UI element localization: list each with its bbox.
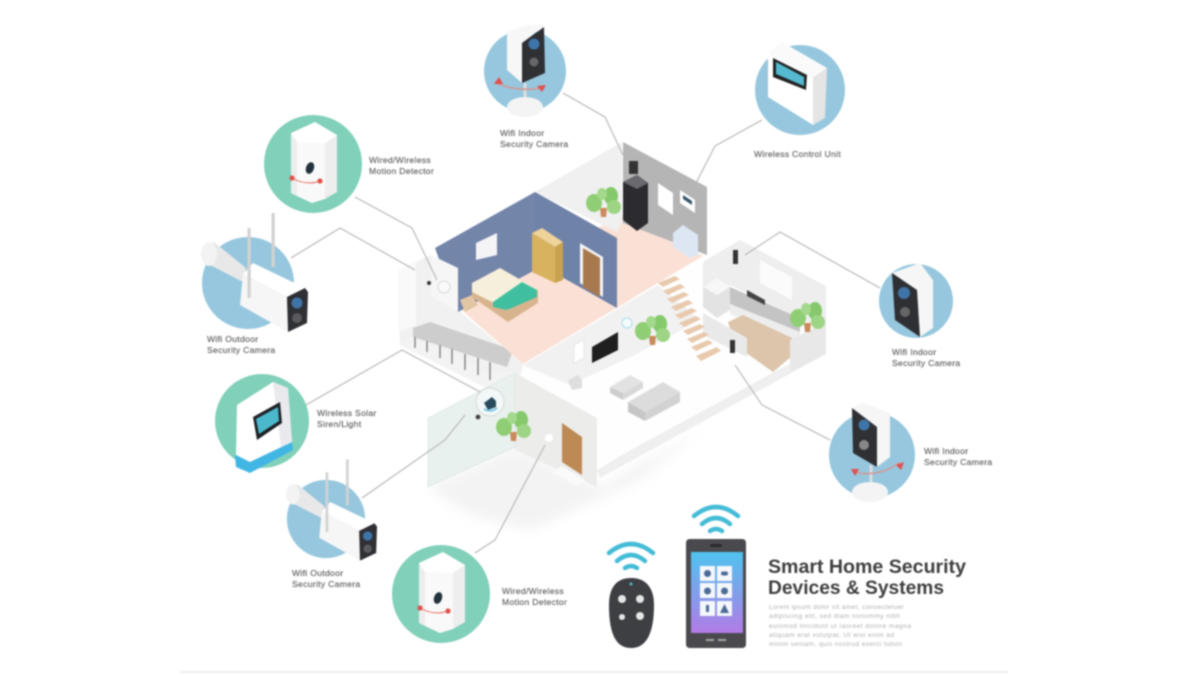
bedroom wall end: [427, 255, 458, 312]
living room back wall: [523, 285, 700, 385]
description text: euismod tincidunt ut laoreet dolore magna: [769, 623, 911, 630]
device: motion detector lower: [392, 545, 490, 643]
label: motion detector lower: Motion Detector: [502, 597, 567, 607]
device: indoor camera lower right: [829, 403, 915, 502]
label: motion detector lower: Wired/Wireless: [502, 586, 564, 596]
device: wireless solar siren: [215, 374, 309, 473]
upper floor: [458, 215, 703, 364]
living room furniture: [568, 315, 680, 421]
description text: adipiscing elit, sed diam nonummy nibh: [769, 613, 900, 620]
stair half wall: [703, 313, 747, 357]
icon: phone wifi signal: [694, 507, 738, 531]
icon: remote wifi signal: [609, 544, 653, 568]
house illustration: [398, 142, 826, 487]
label: top camera: Wifi Indoor: [500, 128, 544, 138]
slab front edge: [597, 344, 826, 478]
back room white wall: [535, 142, 622, 232]
device: outdoor camera lower: [286, 460, 377, 561]
label: outdoor camera upper: Security Camera: [207, 345, 276, 355]
entry plant: [496, 411, 531, 441]
label: motion detector upper: Wired/Wireless: [369, 155, 431, 165]
device: motion detector upper: [264, 115, 362, 213]
label: outdoor camera upper: Wifi Outdoor: [207, 334, 258, 344]
back room items: [586, 161, 698, 258]
label: siren: Wireless Solar: [317, 408, 377, 418]
kitchen walls: [703, 240, 826, 372]
label: outdoor camera lower: Wifi Outdoor: [292, 568, 343, 578]
connector lines: [291, 93, 880, 553]
upper left block and balcony: [398, 255, 523, 402]
title: Devices & Systems: [768, 577, 944, 599]
wall sensors: [476, 250, 738, 419]
back room grey wall: [623, 142, 707, 255]
front wall with door: [515, 373, 597, 487]
glass wall: [428, 373, 515, 487]
key fob remote: [609, 578, 654, 648]
floor shadow: [428, 430, 700, 530]
label: control unit: Wireless Control Unit: [754, 149, 841, 159]
bedroom blue walls: [435, 192, 535, 312]
label: indoor camera right: Wifi Indoor: [892, 347, 936, 357]
description text: Lorem ipsum dolor sit amet, consectetuer: [769, 604, 905, 611]
label: outdoor camera lower: Security Camera: [292, 579, 360, 589]
description text: aliquam erat volutpat. Ut wisi enim ad: [769, 632, 894, 639]
description text: minim veniam, quis nostrud exerci tution: [769, 641, 902, 648]
smartphone: [686, 539, 746, 648]
label: top camera: Security Camera: [500, 139, 568, 149]
app tiles: [700, 566, 732, 616]
device: wireless control unit: [755, 42, 845, 135]
stairs: [658, 276, 721, 361]
label: indoor camera right: Security Camera: [892, 358, 960, 368]
title: Smart Home Security: [768, 556, 966, 578]
bedroom furniture: [460, 228, 603, 322]
device: indoor camera right: [879, 263, 953, 338]
lower floor slab: [515, 240, 826, 478]
label: siren: Siren/Light: [317, 419, 362, 429]
label: motion detector upper: Motion Detector: [369, 166, 434, 176]
device: outdoor camera upper: [201, 213, 308, 332]
label: indoor camera lower right: Wifi Indoor: [924, 446, 968, 456]
device: wifi indoor camera top: [484, 25, 566, 117]
app icons: [704, 570, 729, 613]
label: indoor camera lower right: Security Camera: [924, 457, 992, 467]
